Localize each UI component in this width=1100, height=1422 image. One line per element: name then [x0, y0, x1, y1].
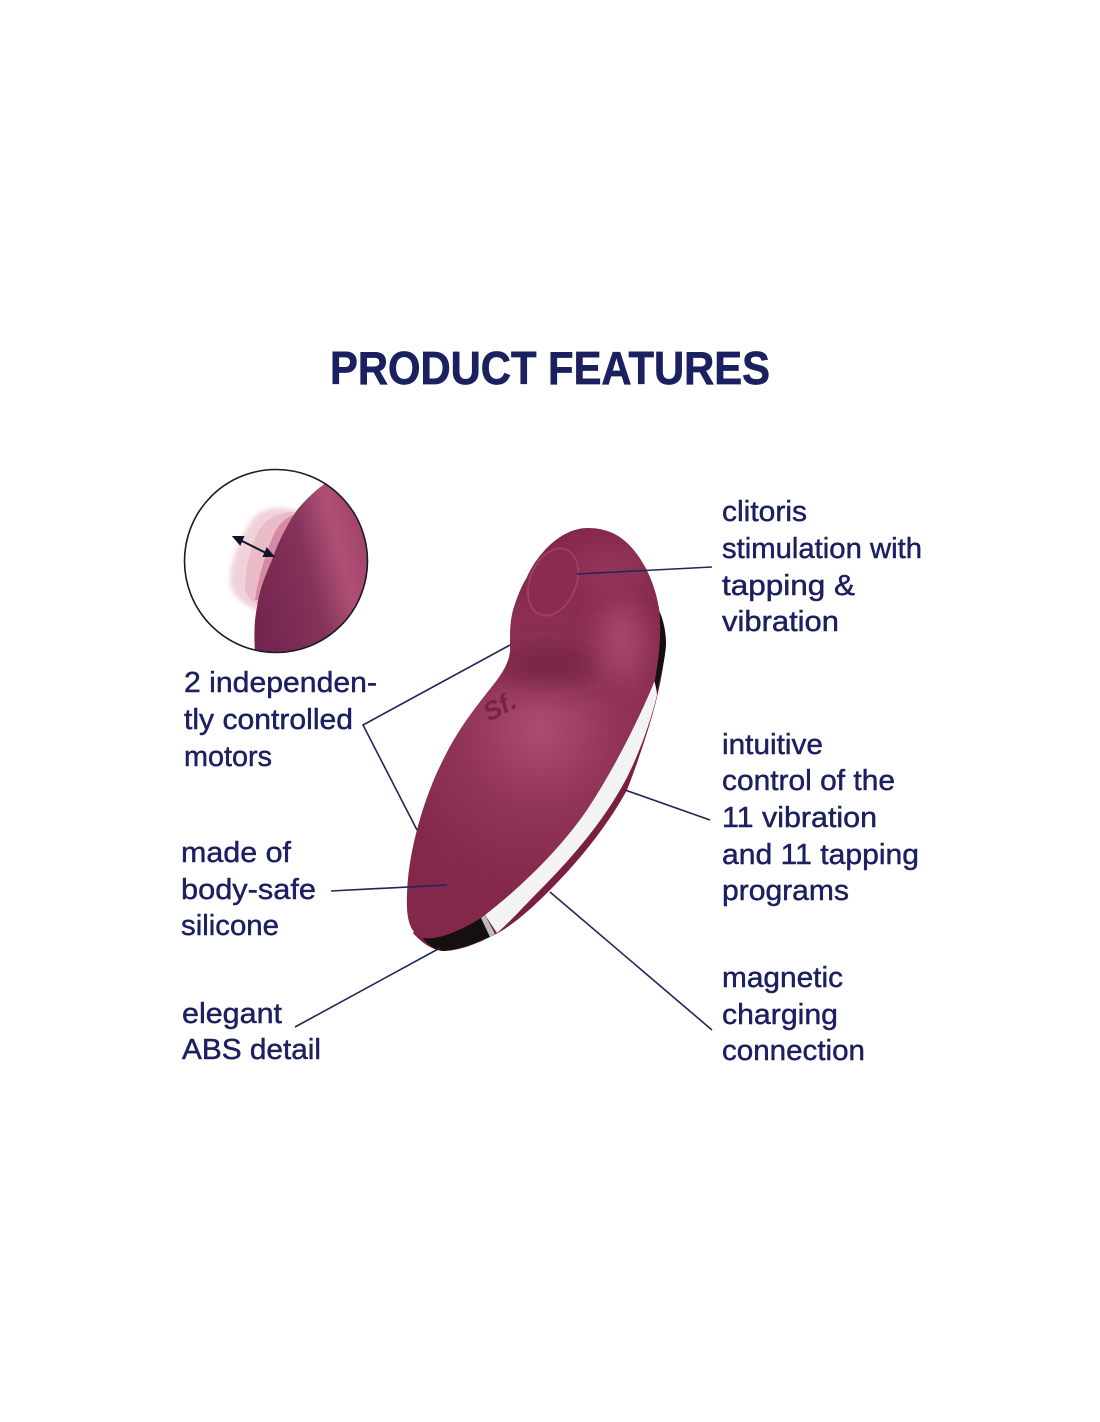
product: body shading	[490, 542, 650, 683]
infographic canvas	[182, 351, 920, 1060]
label: magnetic charging: connection	[722, 1035, 865, 1067]
label: intuitive control: and 11 tapping	[722, 839, 919, 871]
inset: tapping bud	[230, 508, 297, 612]
label: body-safe silicone: made of	[181, 837, 292, 869]
title: PRODUCT FEATURES	[330, 343, 770, 394]
label: body-safe silicone: silicone	[181, 910, 279, 942]
label: body-safe silicone: body-safe	[181, 874, 316, 906]
label: clitoris stimulation: vibration	[722, 606, 839, 638]
product: black top detail	[653, 610, 666, 692]
label: clitoris stimulation	[722, 496, 922, 638]
label: ABS detail: ABS detail	[182, 1034, 321, 1066]
inset: movement arrow	[234, 537, 273, 556]
product: silver highlight on tip	[481, 915, 495, 937]
label: independent motors	[184, 667, 377, 773]
label: ABS detail: elegant	[182, 998, 282, 1030]
label: clitoris stimulation: tapping &	[722, 570, 855, 602]
product: black ABS tip	[423, 915, 495, 951]
leader lines	[295, 567, 712, 1030]
label: magnetic charging: magnetic	[722, 962, 843, 994]
label: intuitive control: intuitive	[722, 729, 823, 761]
label: intuitive control: programs	[722, 875, 849, 907]
product illustration	[407, 528, 666, 951]
label: magnetic charging: charging	[722, 999, 838, 1031]
label: intuitive control: 11 vibration	[722, 802, 877, 834]
label: clitoris stimulation: clitoris	[722, 496, 807, 528]
label: body-safe silicone	[181, 837, 316, 942]
inset: tapping detail circle	[184, 468, 368, 654]
label: clitoris stimulation: stimulation with	[722, 533, 922, 565]
label: independent motors: tly controlled	[184, 704, 353, 736]
inset: circle outline	[184, 470, 368, 652]
label: intuitive control	[722, 729, 919, 907]
label: independent motors: 2 independen-	[184, 667, 377, 699]
inset: device close-up	[254, 484, 367, 652]
product: silicone body	[407, 528, 660, 938]
product: back rim	[413, 600, 665, 951]
label: intuitive control: control of the	[722, 765, 895, 797]
product: silver band	[485, 677, 657, 933]
label: independent motors: motors	[184, 741, 272, 773]
label: magnetic charging	[722, 962, 865, 1067]
product: tapping button ring	[519, 541, 587, 623]
label: ABS detail	[182, 998, 321, 1066]
product: brand mark: Sf.	[478, 685, 521, 727]
